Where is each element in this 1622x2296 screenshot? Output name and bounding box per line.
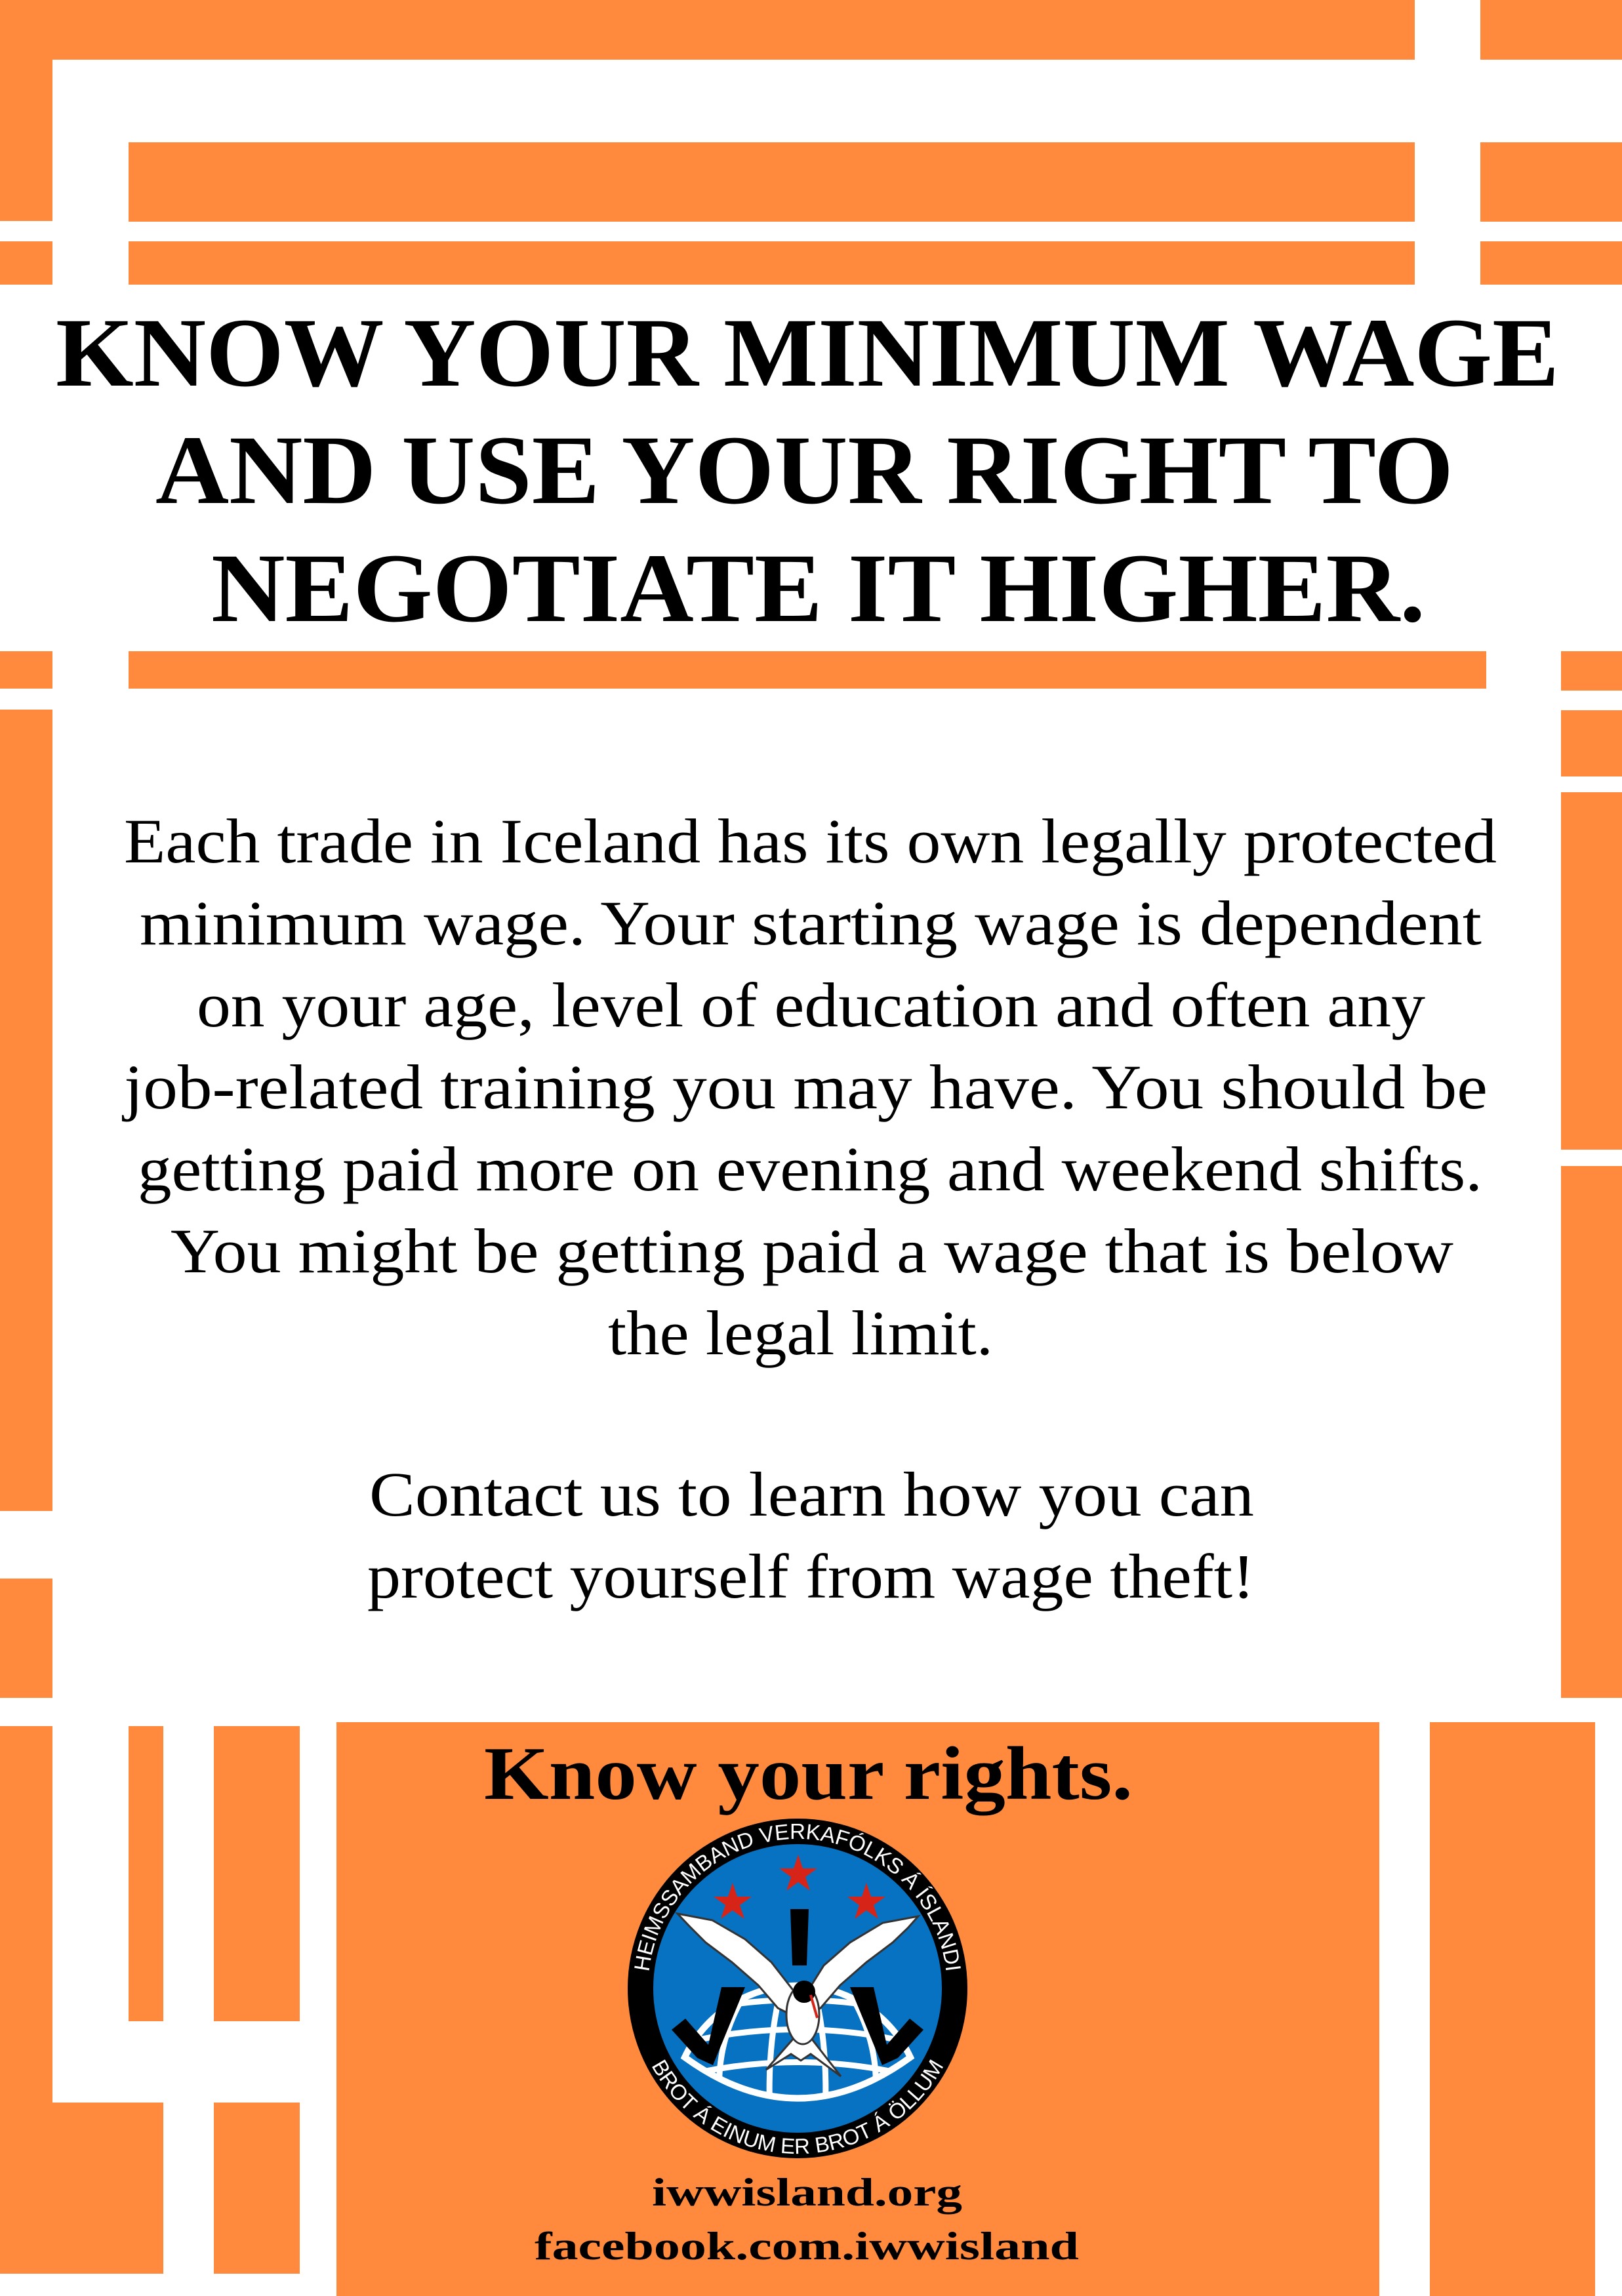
contact: website: iwwisland.org <box>652 2171 962 2214</box>
title: AND USE YOUR RIGHT TO <box>155 416 1453 525</box>
icon: IWW Iceland logo: BROT Á EINUM ER BROT Á ÖLLUM <box>652 2059 943 2154</box>
body text: on your age, level of education and often any <box>197 970 1425 1040</box>
contact text: protect yourself from wage theft! <box>367 1541 1255 1611</box>
body text: job-related training you may have. You should be <box>122 1052 1488 1122</box>
icon: IWW Iceland logo <box>628 1819 967 2158</box>
body text <box>122 806 1497 1368</box>
panel: footer <box>336 1722 1379 2296</box>
body text: Each trade in Iceland has its own legally protected <box>124 806 1497 876</box>
title <box>56 298 1559 643</box>
body text: the legal limit. <box>608 1298 993 1368</box>
contact text <box>367 1459 1255 1611</box>
contact text: Contact us to learn how you can <box>369 1459 1254 1529</box>
icon: IWW Iceland logo: HEIMSSAMBAND VERKAFÓLKS Á ÍSLANDI <box>634 1824 961 1970</box>
body text: minimum wage. Your starting wage is dependent <box>140 888 1482 958</box>
title: NEGOTIATE IT HIGHER. <box>211 534 1425 643</box>
body text: getting paid more on evening and weekend shifts. <box>138 1134 1482 1204</box>
title: KNOW YOUR MINIMUM WAGE <box>56 298 1559 407</box>
heading: know your rights: Know your rights. <box>484 1732 1133 1815</box>
contact: facebook: facebook.com.iwwisland <box>535 2225 1079 2268</box>
body text: You might be getting paid a wage that is below <box>171 1216 1453 1286</box>
